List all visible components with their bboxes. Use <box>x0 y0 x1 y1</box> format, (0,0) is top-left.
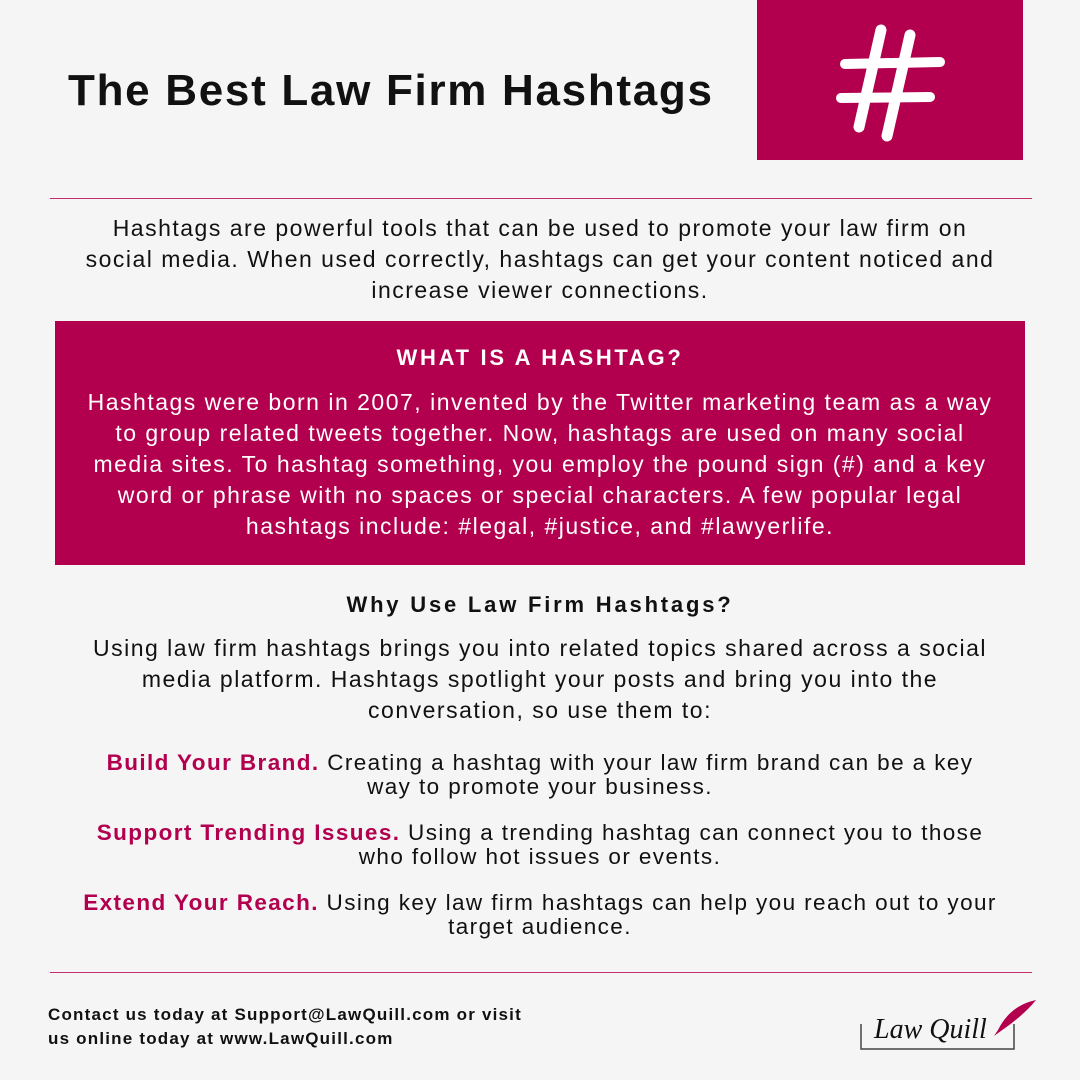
intro text: social media. When used correctly, hashtags can get your content noticed and <box>86 246 994 272</box>
intro text <box>86 215 994 303</box>
text: hashtag definition: media sites. To hashtag something, you employ the pound sign (#) and a key <box>93 451 987 477</box>
text: why use paragraph: conversation, so use them to: <box>368 697 712 723</box>
bullet: reach: Extend Your Reach. Using key law firm hashtags can help you reach out to your <box>83 890 997 915</box>
bullet: reach <box>83 890 997 939</box>
footer contact: Contact us today at Support@LawQuill.com or visit <box>48 1005 522 1024</box>
bullet: build brand: way to promote your business. <box>367 774 713 799</box>
bullet: trending: Support Trending Issues. Using a trending hashtag can connect you to those <box>97 820 983 845</box>
bullet: build brand: Build Your Brand. Creating a hashtag with your law firm brand can be a key <box>107 750 973 775</box>
text: why use paragraph <box>93 635 987 723</box>
footer contact: us online today at www.LawQuill.com <box>48 1029 394 1048</box>
logo: Law Quill: Law Quill <box>873 1014 987 1045</box>
icon: hashtag box <box>757 0 1023 160</box>
text: hashtag definition: hashtags include: #legal, #justice, and #lawyerlife. <box>246 513 834 539</box>
intro text: increase viewer connections. <box>371 277 709 303</box>
text: why use paragraph: Using law firm hashtags brings you into related topics shared across a social <box>93 635 987 661</box>
logo: Law Quill <box>860 1000 1036 1050</box>
bullet: trending: who follow hot issues or events. <box>359 844 721 869</box>
heading: why use: Why Use Law Firm Hashtags? <box>346 592 733 617</box>
text: hashtag definition <box>88 389 992 539</box>
bullet: reach: target audience. <box>448 914 632 939</box>
text: hashtag definition: Hashtags were born in 2007, invented by the Twitter marketing team as a way <box>88 389 992 415</box>
panel: what is a hashtag <box>55 321 1025 565</box>
text: why use paragraph: media platform. Hashtags spotlight your posts and bring you into the <box>142 666 938 692</box>
footer contact <box>48 1005 522 1048</box>
bullet: trending <box>97 820 983 869</box>
heading: what is a hashtag: WHAT IS A HASHTAG? <box>397 345 683 370</box>
intro text: Hashtags are powerful tools that can be used to promote your law firm on <box>113 215 967 241</box>
text: hashtag definition: to group related tweets together. Now, hashtags are used on many social <box>115 420 965 446</box>
text: hashtag definition: word or phrase with no spaces or special characters. A few popular legal <box>118 482 962 508</box>
bullet: build brand <box>107 750 973 799</box>
title: The Best Law Firm Hashtags <box>68 66 714 115</box>
